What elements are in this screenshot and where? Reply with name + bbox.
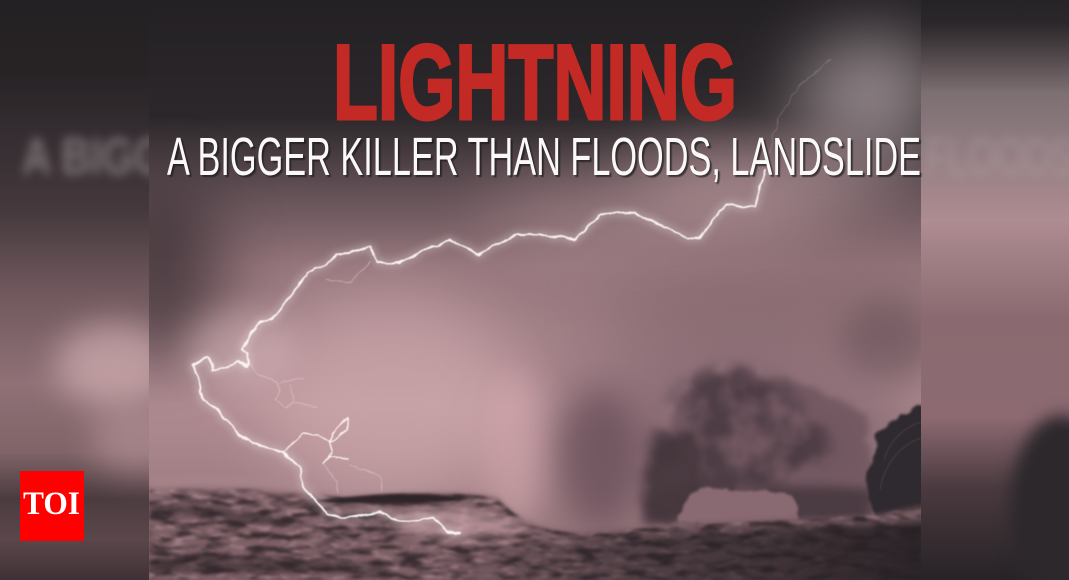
title: LIGHTNING <box>333 22 737 142</box>
panel: left blurred backdrop: A BIGGER <box>22 128 222 186</box>
forked branch <box>283 417 348 462</box>
panel: storm photograph <box>100 0 945 580</box>
lightning glow <box>193 170 765 534</box>
clouds <box>639 367 926 545</box>
logo: TOI <box>20 471 84 541</box>
ground <box>140 485 930 580</box>
lightning bolt <box>193 60 830 534</box>
main channel <box>193 170 765 534</box>
panel: left blurred backdrop <box>0 104 149 580</box>
panel: right blurred backdrop <box>921 0 1069 580</box>
faint upper branch <box>769 59 832 154</box>
logo: TOI: TOI <box>23 486 80 522</box>
faint branches <box>248 263 382 493</box>
